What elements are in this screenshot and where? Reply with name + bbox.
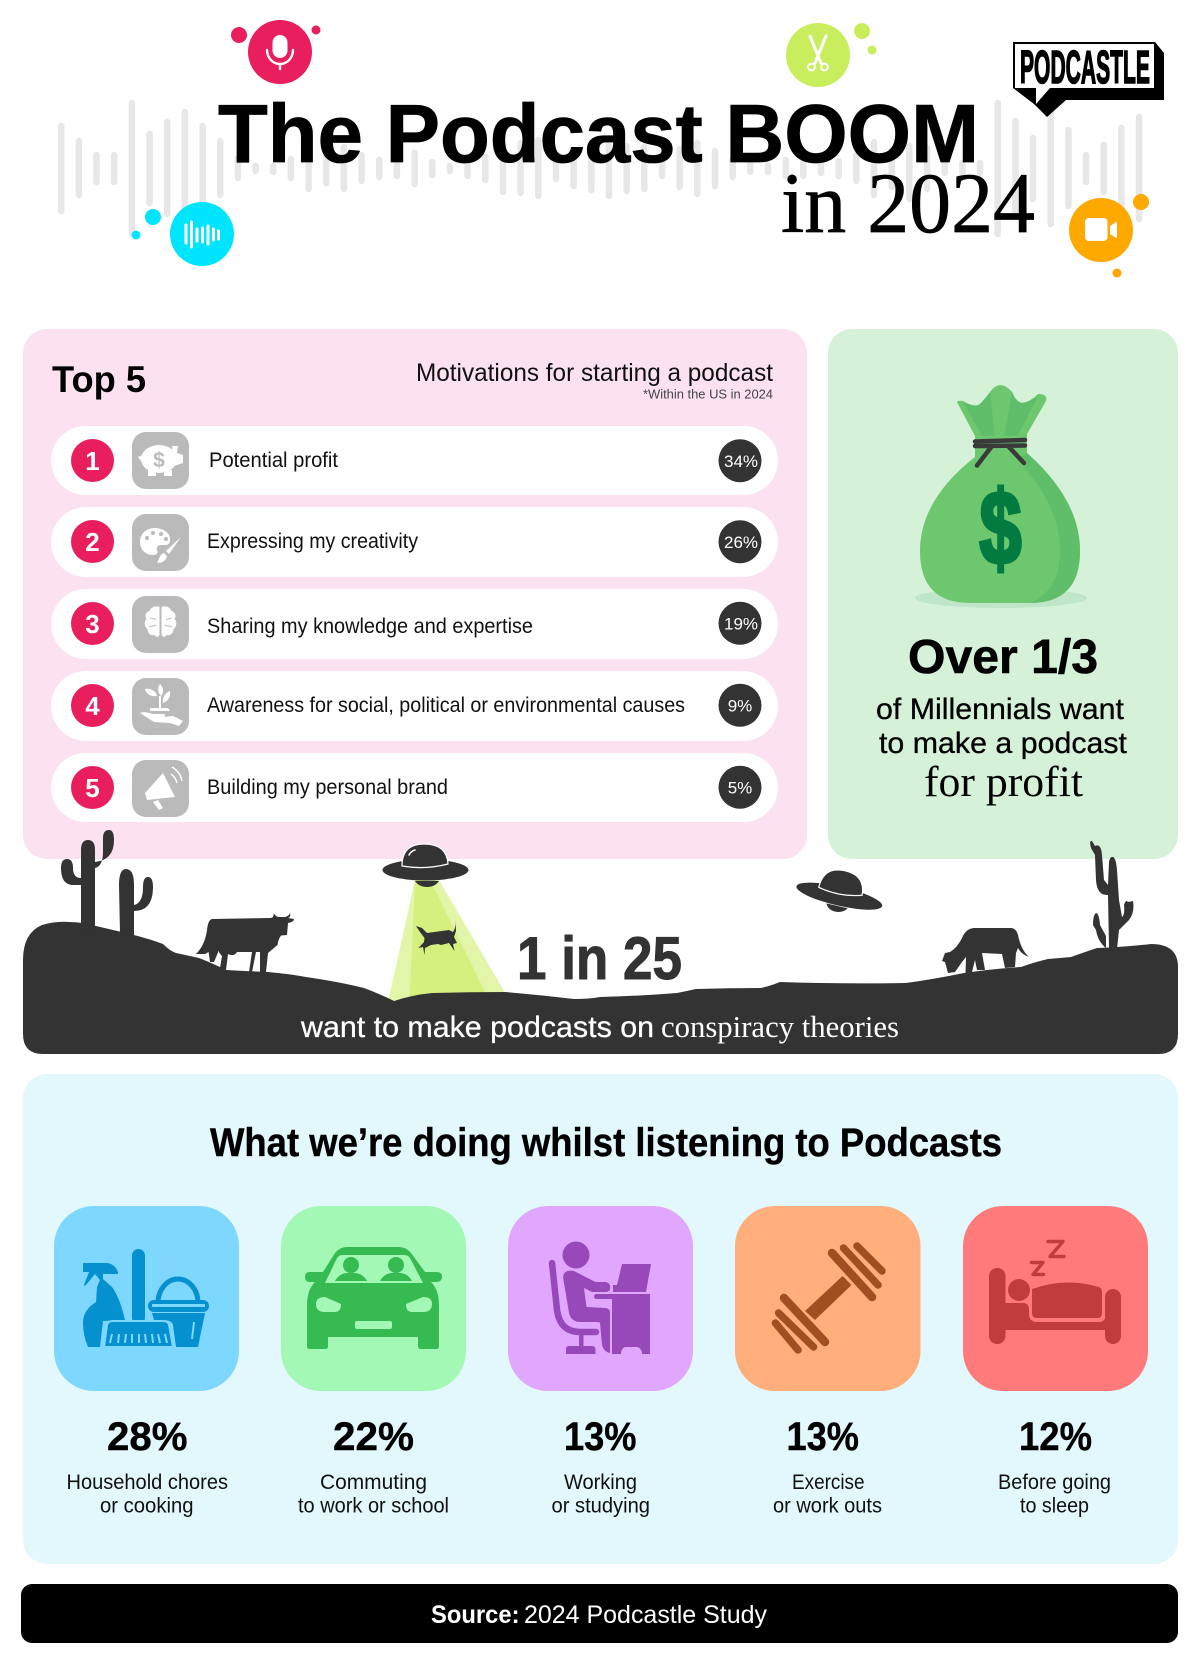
stat: 12%: 12% (1019, 1415, 1092, 1459)
text: conspiracy caption: want to make podcasts on (300, 1011, 654, 1044)
icon: money bag (915, 385, 1087, 608)
source bar: Source: (431, 1601, 520, 1629)
title (218, 87, 1035, 251)
row 1: potential profit: Potential profit (209, 449, 338, 472)
stat: 22%: 22% (333, 1415, 414, 1459)
text: household chores (66, 1471, 228, 1518)
cow grazing (942, 928, 1029, 973)
heading: whilst listening: What we’re doing whilst listening to Podcasts (210, 1121, 1002, 1165)
text: exercise: or work outs (773, 1494, 882, 1518)
icon: microphone badge (231, 20, 320, 84)
row 3: sharing knowledge: Sharing my knowledge and expertise (207, 615, 533, 638)
text: before sleep: to sleep (1020, 1494, 1089, 1518)
row 3: sharing knowledge: 19% (724, 614, 758, 634)
text: before sleep: Before going (998, 1471, 1111, 1494)
text: exercise: Exercise (792, 1471, 864, 1494)
row 3: sharing knowledge: 3 (85, 609, 100, 639)
audio waveform background (61, 103, 1139, 234)
row 1: potential profit: 34% (724, 452, 758, 471)
ufo 1 (382, 844, 468, 887)
stat: 1 in 25: 1 in 25 (517, 925, 682, 992)
tile: commuting (281, 1206, 466, 1391)
row 4: awareness causes: Awareness for social, political or environmental causes (207, 694, 685, 717)
text: exercise (773, 1471, 882, 1518)
row 4: awareness causes (51, 671, 778, 741)
text: conspiracy caption: conspiracy theories (661, 1009, 899, 1044)
text: household chores: Household chores (66, 1471, 228, 1494)
stat: over 1/3: Over 1/3 (908, 631, 1098, 684)
icon: sound wave badge (132, 202, 234, 266)
source bar: 2024 Podcastle Study (524, 1601, 767, 1629)
hill ground (23, 922, 1178, 1054)
row 2: expressing creativity (51, 507, 778, 577)
row 5: personal brand: Building my personal brand (207, 776, 448, 799)
tile: working (508, 1206, 693, 1391)
icon: money bag: $ (980, 471, 1022, 587)
panel: top 5 motivations (23, 329, 807, 859)
text: working (552, 1471, 650, 1518)
text: millennials: of Millennials want (876, 693, 1125, 726)
text: commuting (298, 1471, 449, 1518)
stat: 13% working: 13% (564, 1415, 636, 1459)
panel: conspiracy landscape (23, 830, 1178, 1054)
text: commuting: Commuting (320, 1471, 427, 1494)
row 1: potential profit: $ (153, 449, 165, 472)
panel: whilst listening (23, 1074, 1178, 1564)
row 5: personal brand (51, 753, 778, 822)
tile: household chores (54, 1206, 239, 1391)
row 2: expressing creativity: 2 (85, 527, 100, 557)
row 2: expressing creativity: Expressing my creativity (207, 530, 418, 553)
ufo beam (388, 880, 507, 1004)
text: motivations subtitle: Motivations for starting a podcast (416, 359, 773, 387)
heading: top 5: Top 5 (52, 359, 146, 400)
flying cow (416, 920, 457, 955)
row 1: potential profit (51, 426, 778, 495)
row 4: awareness causes: 9% (728, 696, 752, 716)
tile: before sleep (963, 1206, 1148, 1391)
text: working: Working (564, 1471, 637, 1494)
text: millennials: to make a podcast (879, 727, 1128, 760)
row 1: potential profit: 1 (85, 446, 100, 476)
right cacti (1090, 841, 1134, 949)
stat: 13% exercise: 13% (786, 1415, 859, 1459)
text: millennials (876, 693, 1128, 806)
title: The Podcast BOOM (218, 87, 979, 180)
text: millennials: for profit (924, 759, 1083, 806)
tile: exercise (735, 1206, 920, 1391)
title: in 2024 (781, 155, 1035, 251)
text: commuting: to work or school (298, 1494, 449, 1518)
row 5: personal brand: 5 (85, 773, 100, 803)
row 3: sharing knowledge (51, 589, 778, 659)
row 2: expressing creativity: 26% (724, 533, 758, 552)
panel: millennials profit (828, 329, 1178, 859)
source bar (21, 1584, 1178, 1643)
text: household chores: or cooking (100, 1494, 194, 1518)
ufo 2 (793, 861, 888, 922)
stat: 28%: 28% (107, 1415, 188, 1459)
cow standing (196, 913, 294, 972)
text: before sleep (998, 1471, 1111, 1518)
icon: scissors badge (786, 23, 876, 87)
text: footnote: *Within the US in 2024 (643, 388, 773, 402)
left cacti (61, 830, 153, 936)
icon: video camera badge (1069, 194, 1149, 278)
row 5: personal brand: 5% (728, 778, 752, 798)
row 4: awareness causes: 4 (85, 691, 100, 721)
text: conspiracy caption (300, 1009, 899, 1044)
logo: Podcastle (1013, 41, 1164, 117)
text: working: or studying (552, 1494, 650, 1518)
